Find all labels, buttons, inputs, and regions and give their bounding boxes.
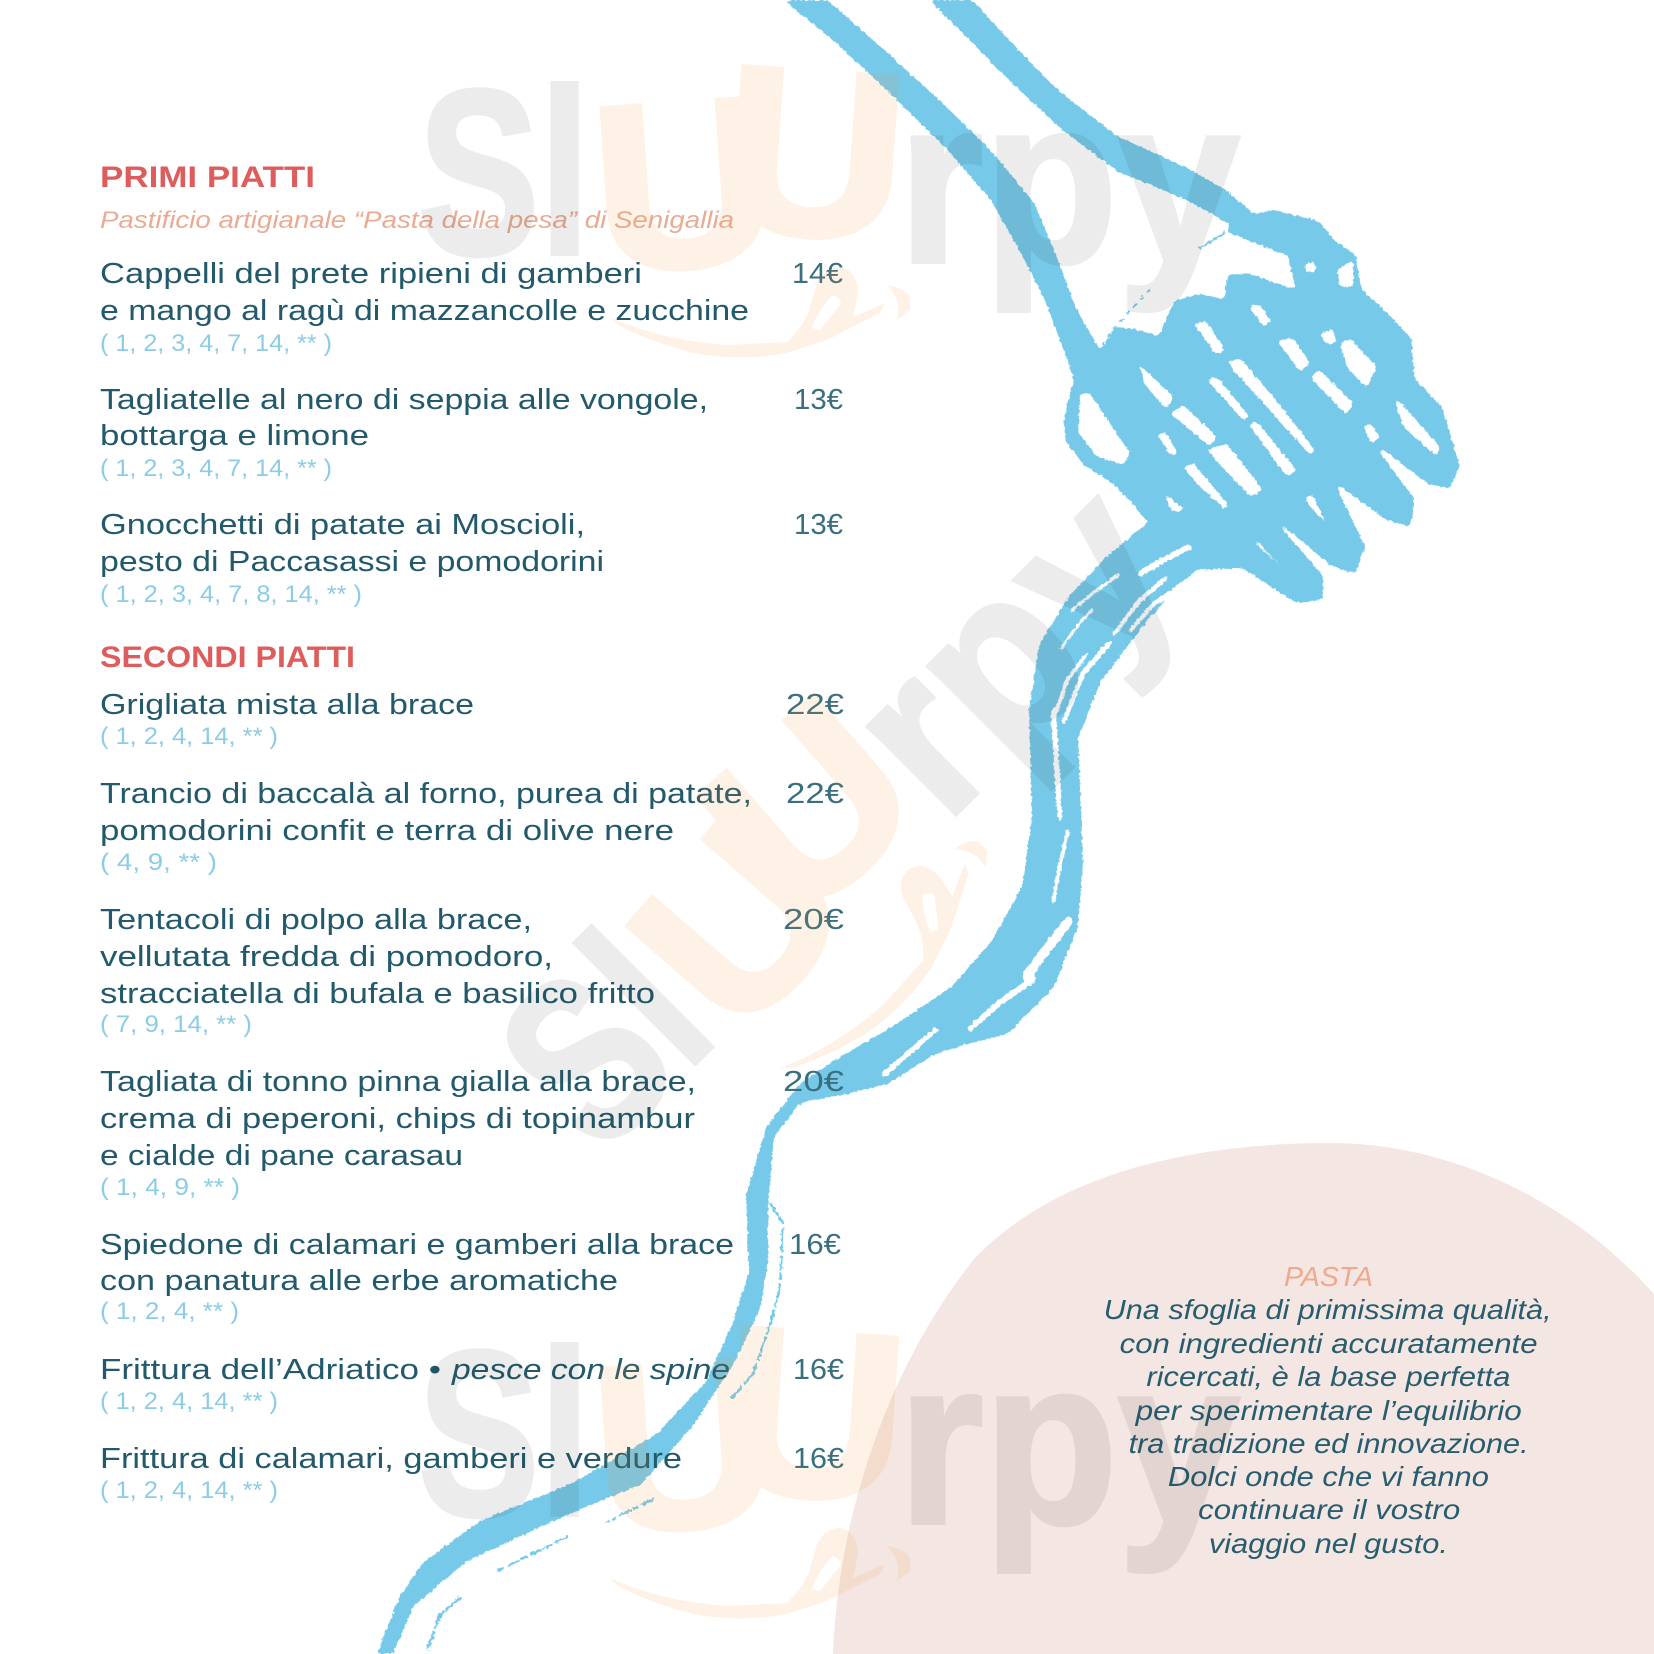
watermark: bottom: U <box>584 1307 784 1583</box>
dish: grigliata <box>100 689 844 750</box>
dish: tagliatelle: bottarga e limone <box>100 420 369 452</box>
dish: spiedone: ( 1, 2, 4, ** ) <box>100 1298 239 1325</box>
watermark: middle rotated <box>431 409 1255 1232</box>
dish: polpo: Tentacoli di polpo alla brace, <box>100 904 532 936</box>
dish: grigliata: ( 1, 2, 4, 14, ** ) <box>100 723 278 750</box>
watermark: middle rotated: U <box>654 648 964 966</box>
dish: frittura adriatico: pesce con le spine <box>451 1354 730 1386</box>
dish: tonno: Tagliata di tonno pinna gialla alla brace, <box>100 1066 696 1098</box>
callout: pasta description: Una sfoglia di primissima qualità, <box>1104 1294 1552 1325</box>
dish: tonno: ( 1, 4, 9, ** ) <box>100 1174 240 1201</box>
dish: frittura calamari: ( 1, 2, 4, 14, ** ) <box>100 1477 278 1504</box>
dish: grigliata: 22€ <box>786 689 844 721</box>
callout: pasta description: ricercati, è la base perfetta <box>1146 1361 1510 1392</box>
dish: frittura adriatico: ( 1, 2, 4, 14, ** ) <box>100 1388 278 1415</box>
dish: gnocchetti: 13€ <box>794 509 843 541</box>
dish: cappelli del prete <box>100 258 843 357</box>
watermark: bottom: U <box>714 1276 915 1552</box>
callout: pasta description: PASTA <box>1284 1261 1373 1292</box>
dish: polpo: ( 7, 9, 14, ** ) <box>100 1011 252 1038</box>
dish: gnocchetti <box>100 509 843 608</box>
watermark: top: Sl <box>418 41 590 305</box>
callout: pasta description: viaggio nel gusto. <box>1209 1528 1448 1559</box>
dish: frittura adriatico <box>100 1354 844 1415</box>
dish: polpo <box>100 904 844 1038</box>
watermark: top <box>418 15 1240 357</box>
dish: gnocchetti: pesto di Paccasassi e pomodorini <box>100 546 604 578</box>
dish: tagliatelle: 13€ <box>794 384 843 416</box>
illustration: pasta strand on fork <box>378 0 1457 1654</box>
dish: polpo: 20€ <box>783 904 844 936</box>
watermark: bottom: rpy <box>898 1310 1240 1574</box>
dish: cappelli del prete: ( 1, 2, 3, 4, 7, 14, ** ) <box>100 330 332 357</box>
dish: frittura calamari <box>100 1443 844 1504</box>
watermark: middle rotated: rpy <box>795 433 1223 861</box>
dish: spiedone: 16€ <box>789 1229 841 1261</box>
dish: tonno: 20€ <box>783 1066 844 1098</box>
callout: pasta description: continuare il vostro <box>1198 1494 1460 1525</box>
dish: spiedone: Spiedone di calamari e gamberi alla brace <box>100 1229 734 1261</box>
watermark: top: U <box>714 15 915 291</box>
dish: tagliatelle: Tagliatelle al nero di seppia alle vongole, <box>100 384 708 416</box>
dish: spiedone <box>100 1229 841 1325</box>
watermark: top: rpy <box>898 49 1240 313</box>
pink background shape <box>833 1143 1654 1654</box>
callout: pasta description: tra tradizione ed innovazione. <box>1129 1428 1529 1459</box>
dish: frittura calamari: Frittura di calamari, gamberi e verdure <box>100 1443 682 1475</box>
dish: spiedone: con panatura alle erbe aromatiche <box>100 1265 618 1297</box>
callout: pasta description <box>1104 1261 1552 1559</box>
watermark: middle rotated: U <box>580 766 898 1077</box>
watermark: top: U <box>584 46 784 322</box>
dish: frittura adriatico: 16€ <box>793 1354 844 1386</box>
subtitle: pastificio: Pastificio artigianale “Pasta della pesa” di Senigallia <box>100 207 734 234</box>
dish: polpo: stracciatella di bufala e basilico fritto <box>100 978 655 1010</box>
dish: frittura calamari: 16€ <box>793 1443 844 1475</box>
dish: frittura adriatico: Frittura dell’Adriatico • <box>100 1354 441 1386</box>
watermark: bottom <box>418 1276 1240 1618</box>
dish: tonno <box>100 1066 844 1201</box>
dish: baccala: Trancio di baccalà al forno, purea di patate, <box>100 778 752 810</box>
dish: baccala <box>100 778 844 876</box>
callout: pasta description: con ingredienti accuratamente <box>1120 1328 1538 1359</box>
watermark: middle rotated: Sl <box>450 887 758 1195</box>
heading: primi piatti: PRIMI PIATTI <box>100 161 315 194</box>
dish: tonno: crema di peperoni, chips di topinambur <box>100 1103 695 1135</box>
dish: polpo: vellutata fredda di pomodoro, <box>100 941 553 973</box>
callout: pasta description: Dolci onde che vi fanno <box>1168 1461 1489 1492</box>
dish: baccala: 22€ <box>786 778 844 810</box>
dish: tagliatelle <box>100 384 843 482</box>
dish: baccala: pomodorini confit e terra di olive nere <box>100 815 674 847</box>
watermark: bottom: Sl <box>418 1302 590 1566</box>
callout: pasta description: per sperimentare l’equilibrio <box>1135 1395 1522 1426</box>
dish: cappelli del prete: 14€ <box>792 258 843 290</box>
dish: baccala: ( 4, 9, ** ) <box>100 849 217 876</box>
dish: tonno: e cialde di pane carasau <box>100 1140 463 1172</box>
heading: secondi piatti: SECONDI PIATTI <box>100 641 355 674</box>
dish: tagliatelle: ( 1, 2, 3, 4, 7, 14, ** ) <box>100 455 332 482</box>
dish: cappelli del prete: Cappelli del prete ripieni di gamberi <box>100 258 642 290</box>
dish: gnocchetti: Gnocchetti di patate ai Moscioli, <box>100 509 585 541</box>
dish: cappelli del prete: e mango al ragù di mazzancolle e zucchine <box>100 295 749 327</box>
dish: gnocchetti: ( 1, 2, 3, 4, 7, 8, 14, ** ) <box>100 581 362 608</box>
dish: grigliata: Grigliata mista alla brace <box>100 689 474 721</box>
